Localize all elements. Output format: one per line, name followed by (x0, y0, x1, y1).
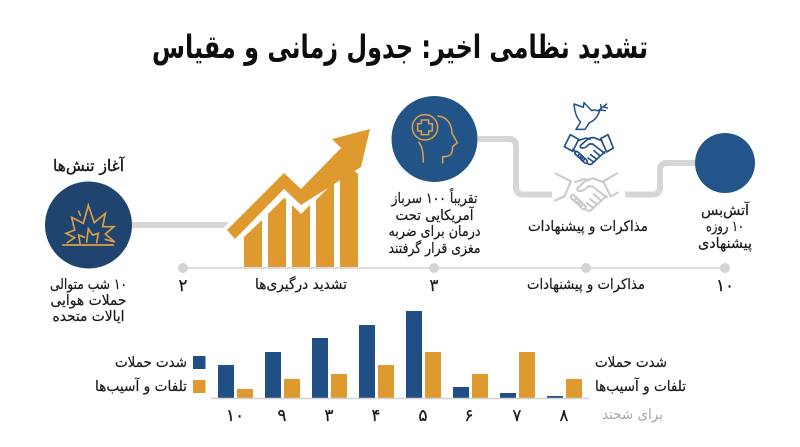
axis labels: ۹ (277, 406, 287, 426)
legend: left: تلفات و آسیب‌ها (95, 377, 187, 395)
text: about 100 US soldiers treated for brain injury: درمان برای ضربه (388, 224, 480, 240)
legend: right: تلفات و آسیب‌ها (595, 377, 686, 395)
icon: ceasefire circle (695, 133, 755, 193)
text: ten nights of US air strikes: ۱۰ شب متوالی (50, 277, 127, 293)
label: negotiations and proposals: مذاکرات و پیشنهادات (528, 219, 648, 235)
timeline axis (178, 263, 730, 273)
axis labels: ۳ (324, 406, 334, 426)
label: timeline 10: ۱۰ (716, 276, 734, 296)
label: timeline negotiations and proposals: مذاکرات و پیشنهادات (527, 277, 645, 293)
icon: dove with olive branch (574, 103, 607, 129)
axis labels: ۴ (371, 406, 381, 426)
connector: brain injury to negotiations (478, 139, 552, 194)
heading: start of tensions: آغاز تنش‌ها (53, 156, 125, 175)
series: strike intensity (218, 311, 563, 398)
note: gray axis caption: برای شحتد (602, 407, 663, 423)
axis labels (226, 406, 569, 426)
legend: right (595, 355, 686, 395)
icon: gray handshake (555, 173, 618, 211)
text: ten nights of US air strikes: ایالات متحده (52, 309, 124, 325)
axis labels: ۸ (559, 406, 569, 426)
bar chart: strike intensity and casualties (211, 311, 589, 426)
text: proposed 10-day ceasefire: پیشنهادی (698, 236, 752, 252)
legend: right: شدت حملات (595, 355, 667, 371)
label: timeline 2: ۲ (178, 276, 188, 296)
icon: explosion in navy circle (45, 182, 132, 268)
text: about 100 US soldiers treated for brain injury: آمریکایی تحت (396, 206, 474, 224)
text: about 100 US soldiers treated for brain injury: مغزی قرار گرفتند (388, 240, 480, 257)
icon: head with medical cross (392, 96, 478, 182)
series: casualties (237, 352, 582, 398)
axis labels: ۱۰ (226, 406, 244, 426)
label: timeline 3: ۳ (429, 276, 439, 296)
icon: rising bar chart with arrow (227, 129, 370, 267)
text: proposed 10-day ceasefire (698, 201, 752, 252)
icon: blue handshake (564, 135, 613, 165)
connector: start to escalation (132, 222, 229, 228)
text: proposed 10-day ceasefire: ۱۰ روزه (706, 219, 744, 235)
text: about 100 US soldiers treated for brain injury (388, 188, 480, 257)
label: escalation of clashes: تشدید درگیری‌ها (255, 276, 347, 293)
text: proposed 10-day ceasefire: آتش‌بس (701, 201, 750, 219)
axis labels: ۵ (418, 406, 428, 426)
title: تشدید نظامی اخیر: جدول زمانی و مقیاس (152, 28, 648, 66)
legend: left (95, 355, 206, 395)
text: about 100 US soldiers treated for brain injury: تقریباً ۱۰۰ سرباز (391, 188, 478, 207)
legend: left: شدت حملات (115, 355, 187, 371)
text: ten nights of US air strikes (50, 277, 127, 325)
connector: negotiations to ceasefire (625, 163, 695, 194)
text: ten nights of US air strikes: حملات هوایی (50, 293, 126, 309)
axis labels: ۶ (464, 406, 474, 426)
axis labels: ۷ (512, 406, 522, 426)
